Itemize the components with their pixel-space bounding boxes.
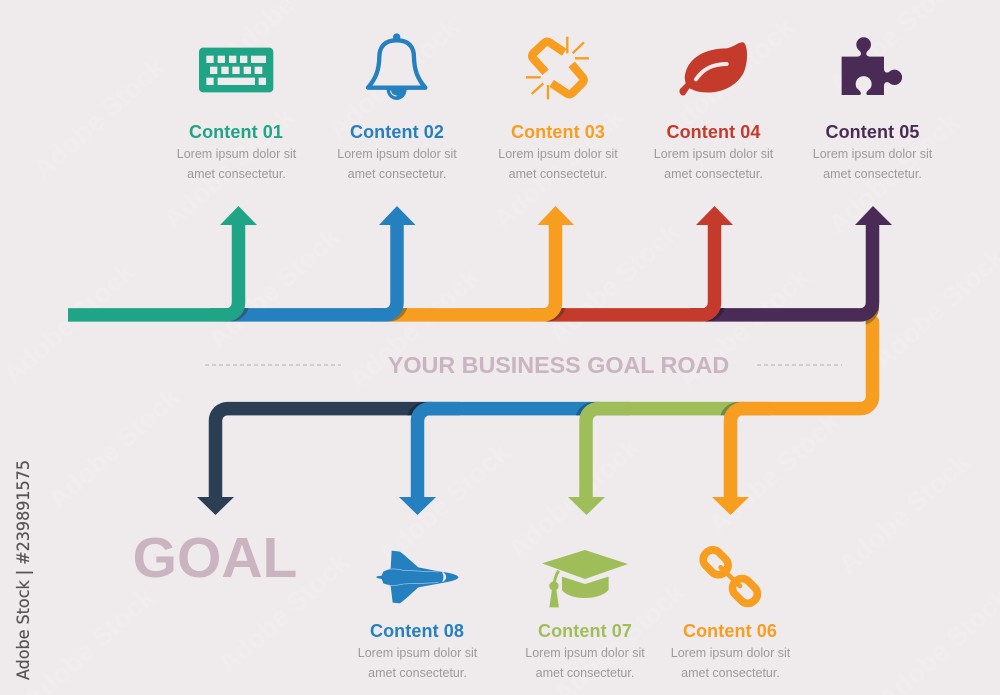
arrow: blue to content 08	[399, 409, 600, 515]
item: content 03	[498, 37, 618, 181]
icon: bell	[368, 33, 425, 100]
item: content 03: amet consectetur.	[509, 167, 607, 181]
road: lower route with four down arrows	[197, 306, 872, 515]
goal label: GOAL	[133, 526, 297, 590]
item: content 05: Lorem ipsum dolor sit	[813, 147, 933, 161]
item: content 02: Lorem ipsum dolor sit	[337, 147, 457, 161]
item: content 06: amet consectetur.	[681, 666, 780, 680]
road: upper route with five up arrows	[68, 206, 892, 315]
icon: chain	[700, 546, 761, 607]
watermark: Adobe Stock	[323, 11, 466, 145]
icon: graduation cap	[542, 550, 628, 607]
item: content 01	[177, 48, 297, 181]
arrow: green to content 01	[68, 206, 257, 315]
item: content 08	[358, 551, 478, 680]
icon: space shuttle	[377, 551, 458, 603]
item: content 07: amet consectetur.	[536, 666, 634, 680]
item: content 02	[337, 33, 457, 181]
arrow: orange to content 06	[712, 322, 872, 515]
watermark: Adobe Stock	[543, 216, 686, 350]
watermark: Adobe Stock	[158, 101, 301, 235]
item: content 04: Content 04	[666, 122, 761, 142]
item: content 01: Lorem ipsum dolor sit	[177, 147, 297, 161]
item: content 06	[671, 546, 791, 680]
icon: leaf	[679, 42, 747, 96]
item: content 03: Content 03	[511, 122, 605, 142]
watermark: Adobe Stock	[823, 106, 966, 240]
watermark: Adobe Stock	[703, 406, 846, 540]
arrow: red to content 04	[545, 206, 733, 315]
road title: YOUR BUSINESS GOAL ROAD	[388, 352, 729, 378]
arrow: green to content 07	[568, 409, 745, 515]
item: content 05: Content 05	[825, 122, 920, 142]
item: content 05: amet consectetur.	[823, 167, 922, 181]
watermark: Adobe Stock	[503, 431, 646, 565]
item: content 08: Content 08	[370, 621, 464, 641]
arrow: purple to content 05	[705, 206, 892, 315]
item: content 06: Lorem ipsum dolor sit	[671, 646, 791, 660]
watermark: Adobe Stock	[203, 221, 346, 355]
item: content 07: Content 07	[538, 621, 632, 641]
item: content 08: Lorem ipsum dolor sit	[358, 646, 478, 660]
item: content 07: Lorem ipsum dolor sit	[525, 646, 645, 660]
item: content 02: Content 02	[350, 122, 444, 142]
watermark: Adobe Stock	[28, 51, 171, 185]
arrow: orange to content 03	[385, 206, 574, 315]
item: content 04: amet consectetur.	[664, 167, 763, 181]
watermark: Adobe Stock	[488, 101, 631, 235]
item: content 07	[525, 550, 645, 680]
watermark: Adobe Stock	[213, 546, 356, 680]
arrow: navy to goal	[197, 409, 432, 515]
watermark: Adobe Stock	[673, 261, 816, 395]
item: content 04: Lorem ipsum dolor sit	[654, 147, 774, 161]
icon: broken link	[526, 37, 589, 99]
item: content 03: Lorem ipsum dolor sit	[498, 147, 618, 161]
watermark: Adobe Stock	[373, 436, 516, 570]
arrow: blue to content 02	[225, 206, 416, 315]
watermark: Adobe Stock	[43, 381, 186, 515]
watermark: Adobe Stock	[0, 256, 141, 390]
item: content 05	[813, 37, 933, 181]
watermark: Adobe Stock	[833, 446, 976, 580]
watermark: Adobe Stock	[658, 11, 801, 145]
item: content 02: amet consectetur.	[348, 167, 446, 181]
icon: keyboard	[199, 48, 273, 92]
item: content 06: Content 06	[683, 621, 777, 641]
watermark: Adobe Stock	[343, 261, 486, 395]
icon: puzzle piece	[842, 37, 902, 95]
item: content 04	[654, 42, 774, 181]
stock id label: Adobe Stock | #239891575	[14, 460, 34, 680]
item: content 01: Content 01	[189, 122, 283, 142]
item: content 08: amet consectetur.	[368, 666, 467, 680]
item: content 01: amet consectetur.	[187, 167, 286, 181]
